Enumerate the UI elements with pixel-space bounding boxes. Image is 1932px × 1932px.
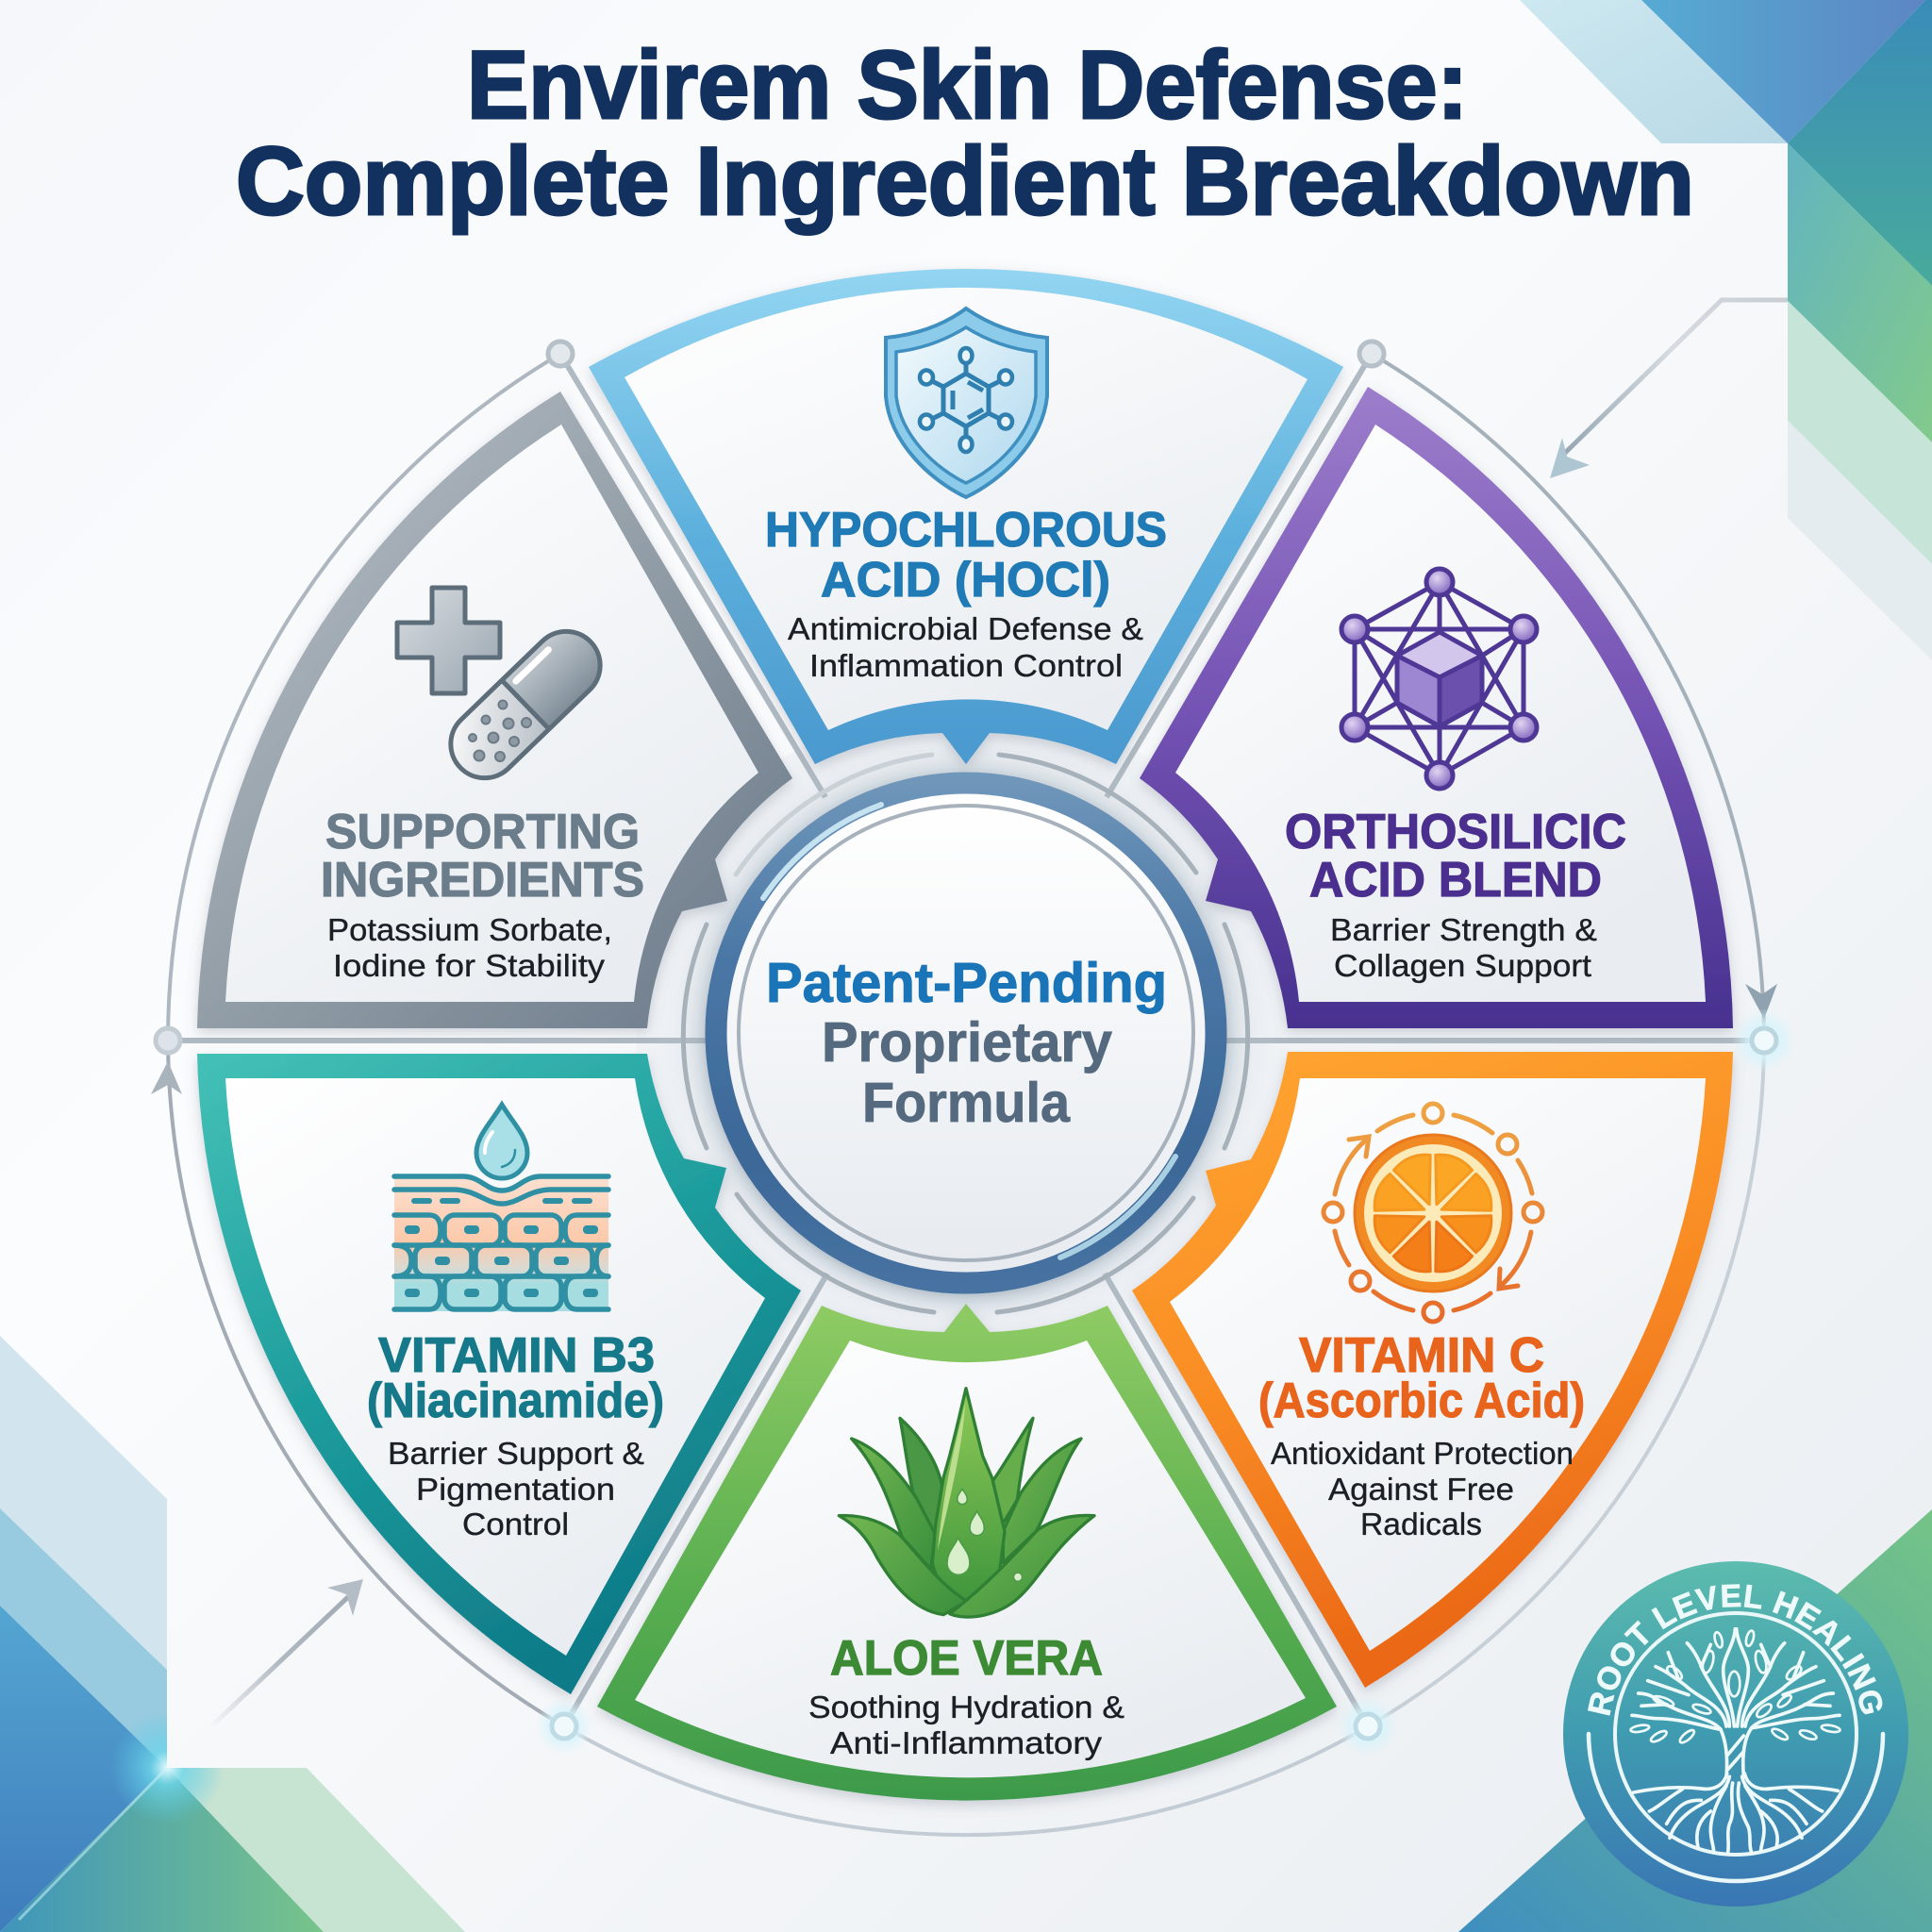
heading: orthosilicic acid blend: ORTHOSILICIC xyxy=(1285,805,1626,859)
description: vitamin b3 xyxy=(388,1436,644,1541)
icon: medical cross xyxy=(397,588,500,693)
heading: hypochlorous acid xyxy=(765,503,1167,608)
description: supporting ingredients: Potassium Sorbate, xyxy=(327,912,612,947)
callout arrow: bottom left xyxy=(209,1579,363,1728)
description: orthosilicic acid blend: Barrier Strength & xyxy=(1330,912,1597,947)
heading: hypochlorous acid: HYPOCHLOROUS xyxy=(765,503,1167,558)
icon: aloe vera plant xyxy=(839,1389,1094,1617)
badge text: ROOT LEVEL HEALING xyxy=(1587,1584,1883,1716)
description: vitamin c: Antioxidant Protection xyxy=(1271,1436,1574,1471)
panel: vitamin c xyxy=(1132,1052,1733,1688)
central hub xyxy=(716,783,1216,1283)
panel: supporting ingredients xyxy=(197,391,792,1028)
spokes and nodes xyxy=(156,341,1796,1757)
icon: capsule xyxy=(437,617,614,792)
icon: tree of life xyxy=(1630,1629,1840,1852)
blue segment frame xyxy=(589,269,1343,764)
description: vitamin b3: Control xyxy=(462,1507,569,1541)
decoration: bottom right gradient corner xyxy=(1458,1509,1932,1932)
purple segment frame xyxy=(1140,387,1733,1028)
icon: shield with molecule xyxy=(886,308,1047,497)
description: vitamin c: Against Free xyxy=(1328,1472,1514,1507)
hub text: Proprietary xyxy=(822,1011,1112,1074)
panel: aloe vera xyxy=(597,1304,1337,1801)
heading: aloe vera: ALOE VERA xyxy=(830,1631,1103,1686)
panel: orthosilicic acid blend xyxy=(1140,387,1733,1028)
hub guide arcs xyxy=(683,755,1248,1312)
icon: skin layers with water drop xyxy=(394,1105,608,1311)
description: hypochlorous acid: Inflammation Control xyxy=(809,648,1123,683)
heading: vitamin b3: (Niacinamide) xyxy=(367,1374,664,1428)
description: aloe vera xyxy=(808,1690,1124,1760)
heading: supporting ingredients xyxy=(321,805,644,908)
description: aloe vera: Soothing Hydration & xyxy=(808,1690,1124,1724)
logo badge: root level healing xyxy=(1563,1561,1908,1907)
title xyxy=(236,31,1694,235)
description: vitamin b3: Pigmentation xyxy=(416,1472,615,1507)
panel: hypochlorous acid xyxy=(589,269,1343,764)
teal segment frame xyxy=(197,1054,801,1694)
gray segment frame xyxy=(197,391,792,1028)
hub text: Patent-Pending xyxy=(766,952,1167,1014)
description: aloe vera: Anti-Inflammatory xyxy=(830,1725,1103,1760)
description: vitamin b3: Barrier Support & xyxy=(388,1436,644,1471)
heading: vitamin c: VITAMIN C xyxy=(1299,1328,1544,1383)
description: supporting ingredients: Iodine for Stability xyxy=(333,948,606,983)
heading: vitamin b3 xyxy=(367,1328,664,1428)
description: hypochlorous acid: Antimicrobial Defense & xyxy=(788,611,1143,646)
panel: vitamin b3 xyxy=(197,1054,801,1694)
heading: supporting ingredients: SUPPORTING xyxy=(325,805,640,859)
hub text: Formula xyxy=(862,1072,1071,1134)
heading: supporting ingredients: INGREDIENTS xyxy=(321,853,644,908)
orange segment frame xyxy=(1132,1052,1733,1688)
title: Complete Ingredient Breakdown xyxy=(236,127,1694,235)
hub text xyxy=(766,952,1167,1134)
heading: vitamin c: (Ascorbic Acid) xyxy=(1258,1374,1585,1428)
description: hypochlorous acid xyxy=(788,611,1143,683)
heading: hypochlorous acid: ACID (HOCl) xyxy=(821,553,1110,608)
green segment frame xyxy=(597,1304,1337,1801)
heading: orthosilicic acid blend xyxy=(1285,805,1626,908)
decoration: top right geometric corner xyxy=(1520,0,1932,660)
icon: orange slice with cycle xyxy=(1324,1104,1542,1322)
decoration: bottom left geometric corner xyxy=(0,1336,465,1932)
callout arrow: top right xyxy=(1550,300,1788,478)
icon: crystal lattice xyxy=(1341,569,1537,789)
description: orthosilicic acid blend: Collagen Support xyxy=(1334,948,1591,983)
heading: vitamin c xyxy=(1258,1328,1585,1428)
description: orthosilicic acid blend xyxy=(1330,912,1597,983)
heading: vitamin b3: VITAMIN B3 xyxy=(378,1328,655,1383)
outer cycle ring with arrows xyxy=(151,354,1777,1835)
description: vitamin c xyxy=(1271,1436,1574,1541)
description: vitamin c: Radicals xyxy=(1360,1507,1482,1541)
heading: orthosilicic acid blend: ACID BLEND xyxy=(1309,853,1602,908)
description: supporting ingredients xyxy=(327,912,612,983)
title: Envirem Skin Defense: xyxy=(467,31,1468,139)
hub surround band xyxy=(636,703,1296,1363)
